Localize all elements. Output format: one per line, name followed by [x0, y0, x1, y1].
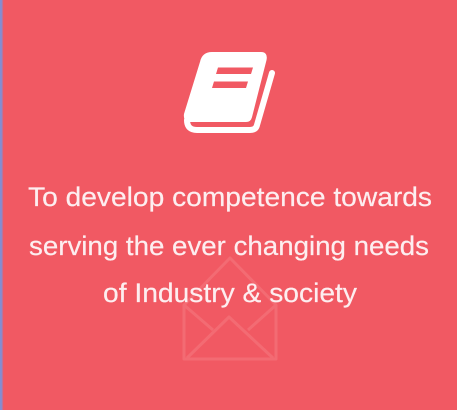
- icon: watermark envelope: [184, 258, 276, 359]
- text block: mission statement: To develop competence towards: [28, 182, 432, 212]
- text block: mission statement: [28, 182, 432, 308]
- text block: mission statement: of Industry & society: [103, 278, 358, 308]
- text block: mission statement: serving the ever changing needs: [29, 231, 429, 261]
- icon: book: [185, 53, 272, 130]
